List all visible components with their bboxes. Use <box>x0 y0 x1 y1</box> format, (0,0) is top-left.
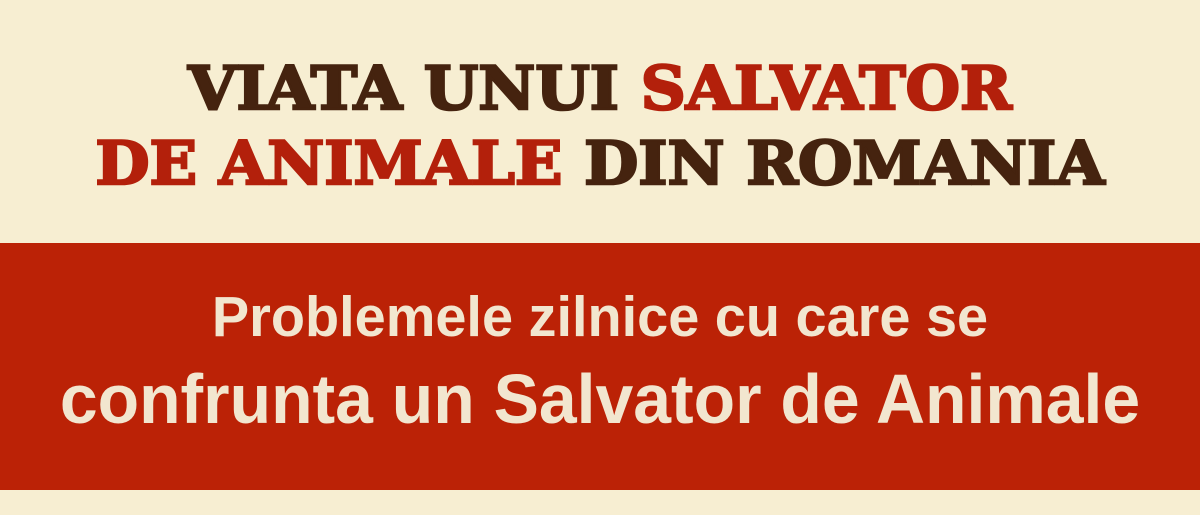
subtitle line 1: Problemele zilnice cu care se <box>212 285 988 349</box>
subtitle line 2: confrunta un Salvator de Animale <box>60 360 1140 438</box>
red band panel <box>0 243 1200 490</box>
title: DE ANIMALE DIN ROMANIA <box>95 129 1105 199</box>
title <box>95 54 1107 199</box>
title: VIATA UNUI SALVATOR <box>188 54 1012 124</box>
